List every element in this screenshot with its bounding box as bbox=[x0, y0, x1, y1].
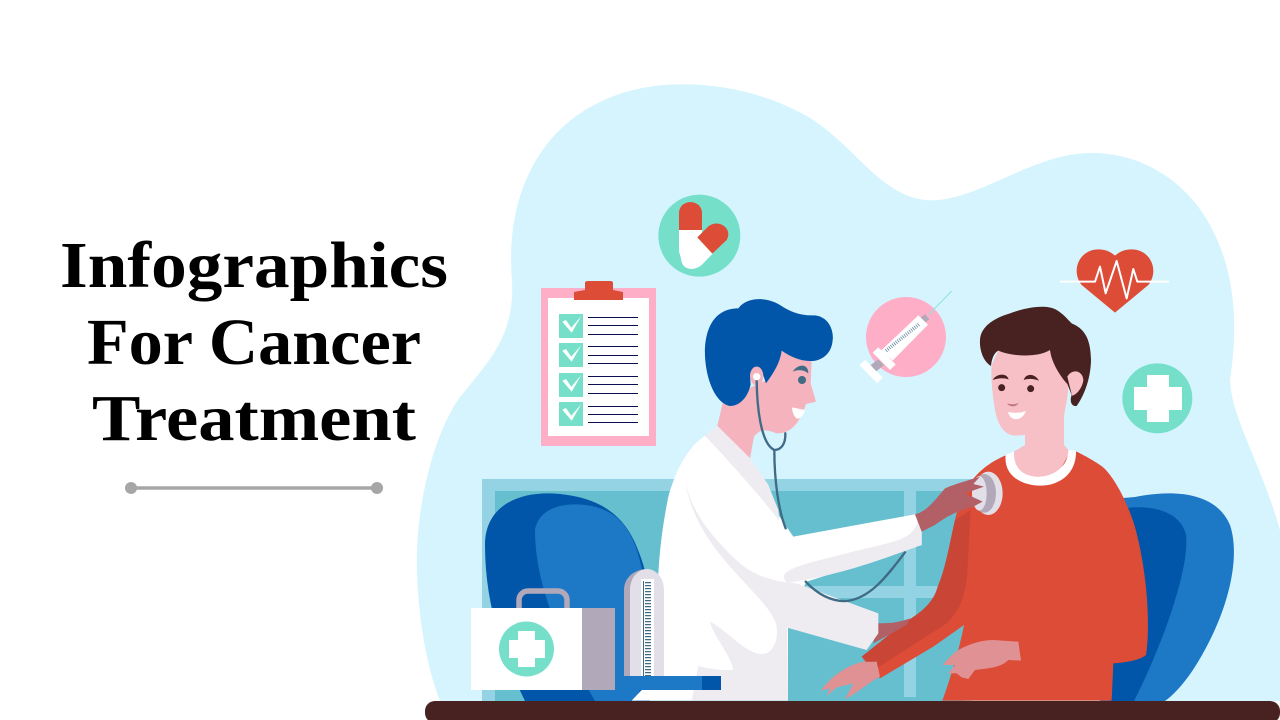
left hand bbox=[821, 662, 880, 699]
background blob bbox=[417, 84, 1280, 701]
doctor hand bbox=[915, 477, 984, 532]
icon: syringe bbox=[859, 291, 952, 383]
medical kit bbox=[471, 591, 615, 690]
table bbox=[425, 701, 1280, 720]
doctor bbox=[632, 299, 1003, 701]
sleeve shadow bbox=[862, 510, 971, 668]
right hand bbox=[943, 640, 1021, 679]
ear bbox=[750, 367, 763, 385]
title line 2: For Cancer bbox=[87, 306, 421, 379]
clipboard clip bbox=[574, 281, 623, 300]
title divider bbox=[125, 482, 383, 494]
eyes bbox=[993, 375, 1039, 392]
nose bbox=[1007, 403, 1019, 406]
chest piece bbox=[972, 472, 1003, 515]
neck and face bbox=[991, 350, 1070, 477]
stethoscope earpiece bbox=[753, 373, 760, 380]
right chair bbox=[1100, 493, 1234, 701]
stethoscope bbox=[757, 377, 905, 601]
patient bbox=[862, 307, 1148, 701]
coat shadow bbox=[685, 480, 878, 701]
icon: pills bbox=[658, 195, 740, 277]
kit handle bbox=[519, 591, 567, 621]
kit cross bbox=[499, 622, 554, 676]
sweater bbox=[862, 452, 1148, 701]
window bbox=[482, 479, 972, 701]
patient hands bbox=[821, 640, 1021, 699]
checklist rows bbox=[559, 314, 638, 426]
icon: medical cross bbox=[1122, 363, 1192, 433]
eye bbox=[798, 376, 806, 384]
hair bbox=[705, 299, 833, 406]
title line 3: Treatment bbox=[92, 382, 416, 455]
hair bbox=[980, 307, 1091, 406]
icon: heart with pulse bbox=[1061, 249, 1168, 313]
icon: clipboard checklist bbox=[541, 281, 656, 446]
collar bbox=[1005, 450, 1076, 486]
ear bbox=[1067, 371, 1083, 396]
title line 1: Infographics bbox=[60, 229, 448, 302]
coat base bbox=[632, 426, 922, 701]
neck and face bbox=[717, 351, 816, 458]
eyebrow bbox=[793, 366, 808, 373]
blood pressure gauge bbox=[624, 569, 721, 690]
smile bbox=[792, 407, 805, 419]
smile bbox=[1008, 411, 1026, 419]
title bbox=[60, 229, 448, 455]
left chair bbox=[485, 493, 653, 701]
coat lapel bbox=[705, 426, 779, 521]
lower hand bbox=[873, 618, 910, 643]
sleeve shadow bbox=[784, 517, 922, 583]
